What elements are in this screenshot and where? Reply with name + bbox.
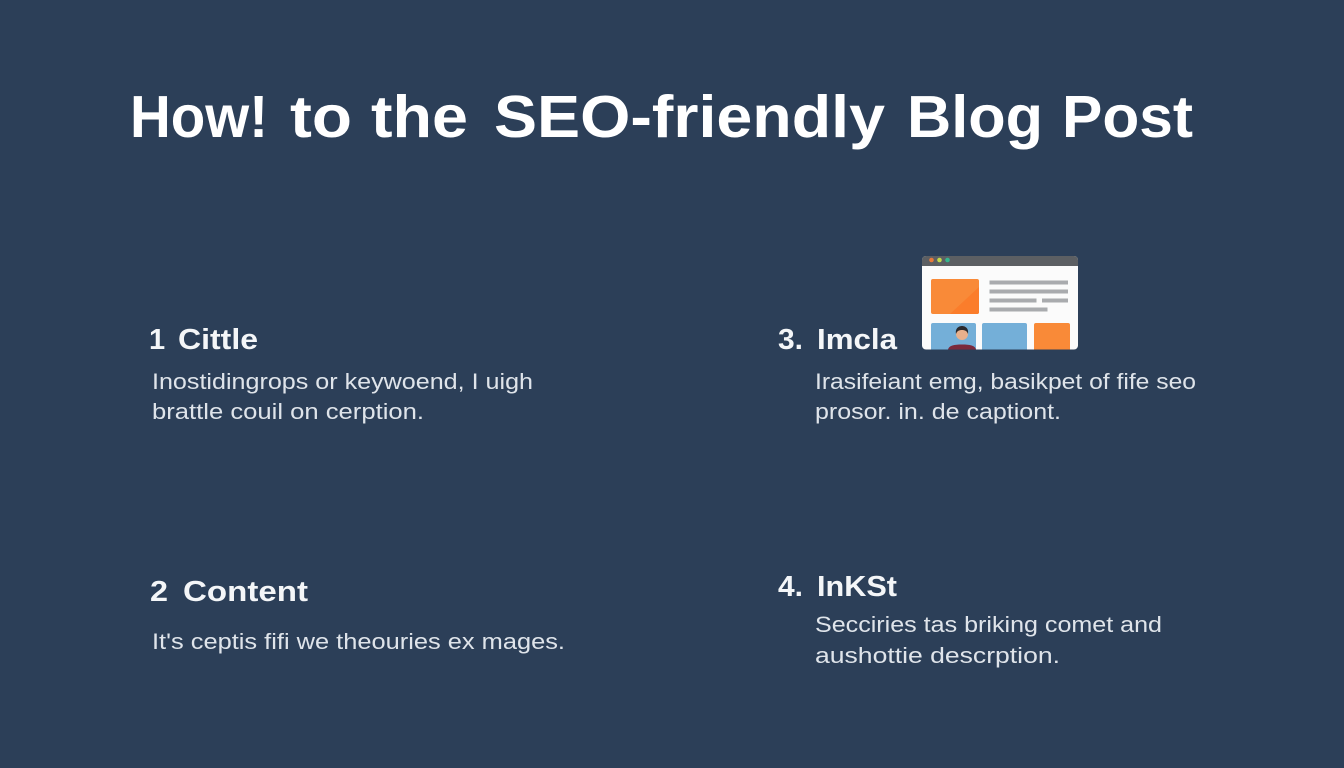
step 4 heading <box>778 571 897 603</box>
step 3 description: Irasifeiant emg, basikpet of fife seo <box>815 369 1196 394</box>
blue tile with person <box>931 323 976 350</box>
title: Blog <box>907 84 1043 150</box>
icon: browser window <box>922 256 1078 350</box>
step 4 heading: 4. <box>778 571 803 603</box>
step 2 description: It's ceptis fifi we theouries ex mages. <box>152 629 565 654</box>
title: to <box>290 84 352 150</box>
step 3 description <box>815 369 1196 424</box>
panel: step 4 links <box>778 571 1162 668</box>
title: How! <box>130 84 268 150</box>
step 1 heading <box>149 324 258 356</box>
step 1 heading: 1 <box>149 324 165 356</box>
orange image block <box>931 279 979 314</box>
title: the <box>371 84 468 150</box>
text lines <box>990 280 1068 312</box>
step 2 heading: 2 <box>150 576 168 608</box>
step 3 description: prosor. in. de captiont. <box>815 399 1061 424</box>
panel: step 3 image <box>778 256 1196 424</box>
browser title bar <box>922 256 1078 266</box>
step 1 description: brattle couil on cerption. <box>152 399 424 424</box>
step 1 heading: Cittle <box>178 324 258 356</box>
step 4 heading: InKSt <box>817 571 897 603</box>
step 4 description: Secciries tas briking comet and <box>815 612 1162 637</box>
title <box>130 84 1193 150</box>
step 3 heading <box>778 324 898 356</box>
panel: step 1 title <box>149 324 533 424</box>
step 2 heading <box>150 576 308 608</box>
step 2 heading: Content <box>183 576 308 608</box>
step 4 description <box>815 612 1162 668</box>
panel: step 2 content <box>150 576 565 654</box>
step 3 heading: Imcla <box>817 324 898 356</box>
step 3 heading: 3. <box>778 324 803 356</box>
orange tile <box>1034 323 1070 350</box>
blue tile <box>982 323 1027 350</box>
title: Post <box>1062 84 1193 150</box>
step 1 description <box>152 369 533 424</box>
title: SEO-friendly <box>494 84 885 150</box>
step 1 description: Inostidingrops or keywoend, I uigh <box>152 369 533 394</box>
step 4 description: aushottie descrption. <box>815 643 1060 668</box>
